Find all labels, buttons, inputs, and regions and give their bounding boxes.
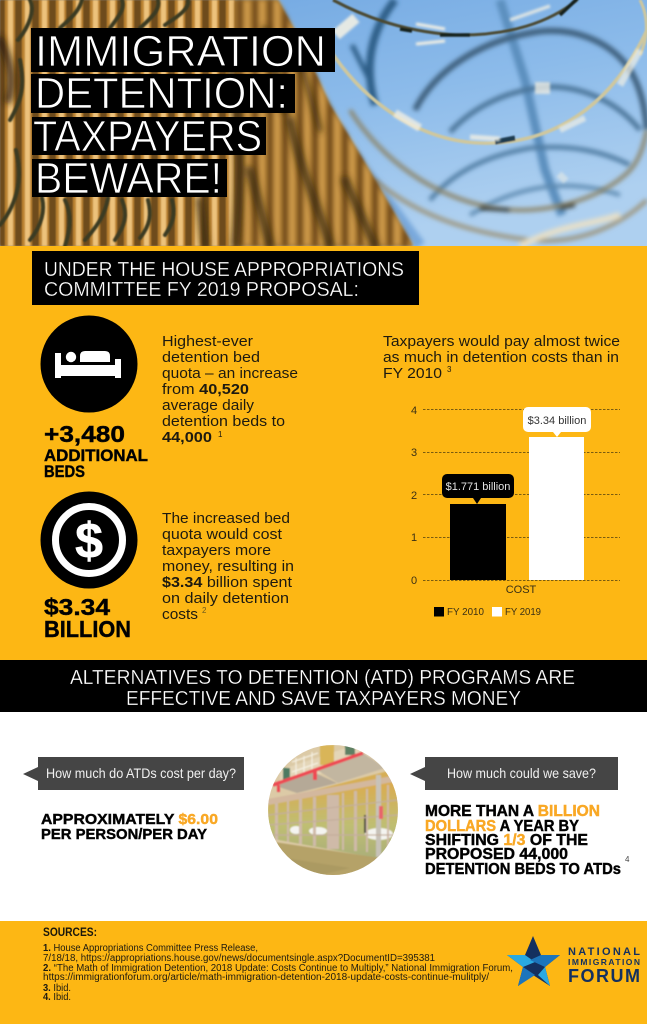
text: bed quota: Highest-ever <box>162 333 253 350</box>
text: savings answer: DETENTION BEDS TO ATDs <box>425 861 621 878</box>
source list: https://immigrationforum.org/article/math-immigration-detention-2018-update-costs-continue-mulitply/ <box>43 972 489 983</box>
section heading: UNDER THE HOUSE APPROPRIATIONS <box>44 259 404 281</box>
text: bed quota: average daily <box>162 397 255 414</box>
upper tier <box>280 748 370 782</box>
text: chart heading <box>383 333 620 382</box>
axis labels: 1 <box>411 532 417 544</box>
text: bed quota: 1 <box>218 430 223 439</box>
banner: alternatives to detention: EFFECTIVE AND SAVE TAXPAYERS MONEY <box>126 688 521 710</box>
callout: savings: How much could we save? <box>447 765 596 781</box>
text: savings answer: SHIFTING 1/3 OF THE <box>425 832 588 849</box>
text: chart heading: 3 <box>447 365 452 374</box>
icon: bed <box>40 316 138 412</box>
stat: additional beds: +3,480 <box>44 421 125 447</box>
title: BEWARE! <box>35 154 222 203</box>
stat: additional beds: ADDITIONAL <box>44 447 148 465</box>
title <box>31 27 335 203</box>
banner: alternatives to detention <box>0 660 647 712</box>
photo: detention cells <box>268 745 398 880</box>
callout: cost per day <box>23 757 244 790</box>
razor wire coils <box>330 0 647 246</box>
posts <box>275 775 389 857</box>
text: cost of quota: 2 <box>202 606 207 615</box>
text: bed quota: quota – an increase <box>162 365 298 382</box>
text: bed quota: from 40,520 <box>162 381 249 398</box>
source list: 7/18/18, https://appropriations.house.gov/news/documentsingle.aspx?DocumentID=395381 <box>43 953 435 964</box>
axis labels: 0 <box>411 575 417 587</box>
beam <box>268 778 398 802</box>
axis labels <box>411 405 417 587</box>
text: ATD cost answer: PER PERSON/PER DAY <box>41 826 207 843</box>
text: ATD cost answer <box>41 811 218 843</box>
text: bed quota <box>162 333 298 446</box>
text: bed quota: detention bed <box>162 349 260 366</box>
axis labels: 3 <box>411 447 417 459</box>
logo: National Immigration Forum <box>507 936 640 986</box>
callout: cost per day: How much do ATDs cost per day? <box>46 765 236 781</box>
text: chart heading: FY 2010 <box>383 365 442 382</box>
icon: dollar coin <box>40 492 138 588</box>
text: savings answer <box>425 803 630 878</box>
tooltip: 1.771 billion: $1.771 billion <box>446 481 510 493</box>
legend: FY 2010 <box>447 607 484 618</box>
ceilings <box>273 772 337 793</box>
section heading: COMMITTEE FY 2019 PROPOSAL: <box>44 279 359 301</box>
stat: 3.34 billion <box>44 594 131 642</box>
text: ATD cost answer: APPROXIMATELY $6.00 <box>41 811 218 828</box>
beds <box>290 826 302 834</box>
stat: 3.34 billion: BILLION <box>44 616 131 642</box>
source list: 3. Ibid. <box>43 983 71 994</box>
sources heading: SOURCES: <box>43 925 97 939</box>
source list: 1. House Appropriations Committee Press Release, <box>43 943 258 954</box>
text: savings answer: DOLLARS A YEAR BY <box>425 818 580 835</box>
red rail <box>273 753 363 785</box>
cross bars <box>268 800 398 835</box>
text: cost of quota: costs <box>162 606 198 623</box>
title: TAXPAYERS <box>33 112 262 161</box>
text: savings answer: 4 <box>625 855 630 864</box>
panel: House proposal <box>0 246 647 660</box>
chain-link fence <box>0 0 413 246</box>
logo: National Immigration Forum: NATIONAL <box>568 946 640 958</box>
tooltip: 3.34 billion: $3.34 billion <box>528 415 586 427</box>
tooltip: 1.771 billion <box>442 474 514 504</box>
text: cost of quota <box>162 510 294 623</box>
text: savings answer: PROPOSED 44,000 <box>425 846 568 863</box>
text: cost of quota: on daily detention <box>162 590 289 607</box>
text: cost of quota: The increased bed <box>162 510 290 527</box>
logo: National Immigration Forum: FORUM <box>568 966 640 986</box>
banner: alternatives to detention: ALTERNATIVES TO DETENTION (ATD) PROGRAMS ARE <box>70 667 575 689</box>
stat: additional beds: BEDS <box>44 463 85 481</box>
panel: ATD programs <box>23 745 630 875</box>
text: bed quota: 44,000 <box>162 429 212 446</box>
source list <box>43 943 513 1003</box>
source list: 4. Ibid. <box>43 992 71 1003</box>
text: chart heading: as much in detention costs than in <box>383 349 619 366</box>
title: IMMIGRATION <box>35 27 326 76</box>
text: cost of quota: $3.34 billion spent <box>162 574 293 591</box>
icon: star <box>507 936 560 986</box>
legend <box>434 607 541 618</box>
title: DETENTION: <box>35 69 288 118</box>
bar chart: detention costs <box>411 405 620 618</box>
bar: FY 2010 <box>450 504 506 580</box>
bar chart: detention costs: COST <box>506 584 537 596</box>
section heading <box>32 251 419 305</box>
hero photo: razor wire and fence <box>0 0 647 246</box>
floor <box>276 842 378 875</box>
text: cost of quota: taxpayers more <box>162 542 271 559</box>
text: cost of quota: quota would cost <box>162 526 283 543</box>
text: bed quota: detention beds to <box>162 413 285 430</box>
text: cost of quota: money, resulting in <box>162 558 294 575</box>
legend: FY 2019 <box>505 607 541 618</box>
panel: sources footer <box>0 921 647 1024</box>
cell block <box>268 780 398 862</box>
bar: FY 2019 <box>529 437 584 580</box>
stat: additional beds <box>44 421 148 481</box>
axis labels: 4 <box>411 405 417 417</box>
callout: savings <box>410 757 618 790</box>
axis labels: 2 <box>411 490 417 502</box>
tooltip: 3.34 billion <box>523 407 591 437</box>
text: chart heading: Taxpayers would pay almost twice <box>383 333 620 350</box>
text: savings answer: MORE THAN A BILLION <box>425 803 600 820</box>
icon: dollar coin: $ <box>75 513 103 569</box>
stat: 3.34 billion: $3.34 <box>44 594 110 620</box>
source list: 2. “The Math of Immigration Detention, 2018 Update: Costs Continue to Multiply,” National Immigration Forum, <box>43 963 513 974</box>
fence wire mesh <box>0 0 375 246</box>
logo: National Immigration Forum: IMMIGRATION <box>568 957 640 967</box>
